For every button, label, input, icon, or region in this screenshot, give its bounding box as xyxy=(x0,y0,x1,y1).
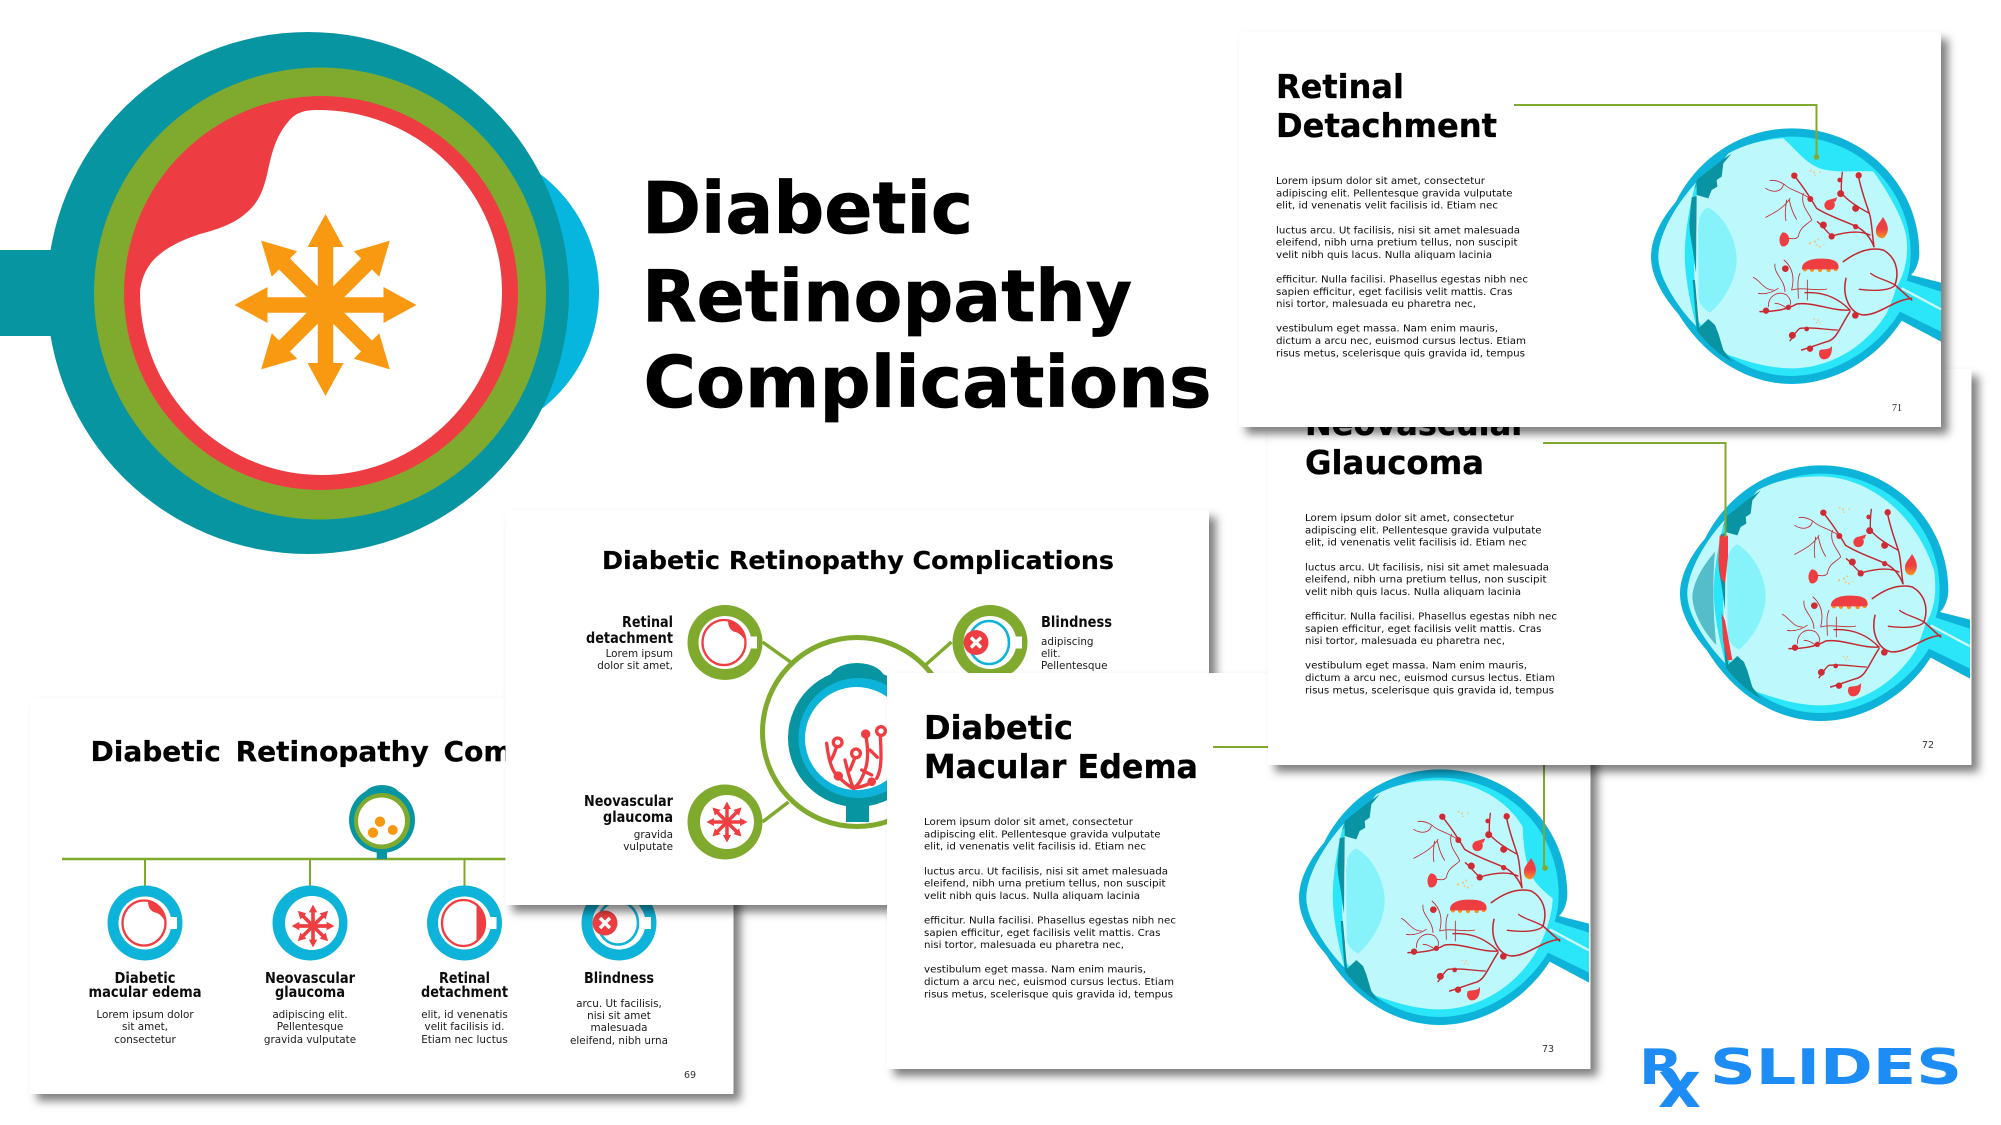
body text: nisi tortor, malesuada eu pharetra nec, xyxy=(1305,636,1505,647)
body text: Lorem ipsum dolor sit amet, consectetur xyxy=(924,817,1134,828)
panel: slide 70 hub diagram xyxy=(506,510,1209,905)
top eye icon xyxy=(349,785,415,859)
red neovascular tissue xyxy=(1718,536,1728,583)
body text: luctus arcu. Ut facilisis, nisi sit amet malesuada xyxy=(924,866,1168,877)
leader line xyxy=(1543,443,1726,537)
panel: slide 69 timeline xyxy=(30,698,734,1094)
slide heading xyxy=(1305,405,1527,482)
connector stems xyxy=(145,859,464,886)
item: retinal detachment: Retinal xyxy=(439,970,490,987)
central hub ring xyxy=(762,638,952,826)
item: neovascular glaucoma: gravida xyxy=(634,829,673,841)
slide heading: Neovascular xyxy=(1305,405,1527,443)
body text: dictum a arcu nec, euismod cursus lectus. Etiam xyxy=(1305,673,1555,684)
item: neovascular glaucoma: gravida vulputate xyxy=(264,1034,356,1046)
item: blindness: elit. xyxy=(1041,648,1061,660)
body text: risus metus, scelerisque quis gravida id, tempus xyxy=(924,989,1173,1000)
item: neovascular glaucoma: Neovascular xyxy=(584,793,674,810)
body text: velit nibh quis lacus. Nulla aliquam lacinia xyxy=(1305,587,1521,598)
item: retinal detachment: Etiam nec luctus xyxy=(421,1034,508,1046)
item: diabetic macular edema: Lorem ipsum dolor xyxy=(96,1009,194,1021)
body text: elit, id venenatis velit facilisis id. Etiam nec xyxy=(1305,538,1527,549)
item: neovascular glaucoma: glaucoma xyxy=(603,809,673,826)
logo: Rx Slides xyxy=(1639,1039,1962,1123)
body text: sapien efficitur, eget facilisis velit mattis. Cras xyxy=(1305,624,1542,635)
body text: Lorem ipsum dolor sit amet, consectetur xyxy=(1305,513,1515,524)
body text: luctus arcu. Ut facilisis, nisi sit amet malesuada xyxy=(1305,562,1549,573)
timeline line xyxy=(62,858,650,860)
connectors xyxy=(762,642,952,822)
item: retinal detachment: Retinal xyxy=(622,614,673,631)
item: diabetic macular edema: Diabetic xyxy=(114,970,176,987)
body text: risus metus, scelerisque quis gravida id, tempus xyxy=(1305,685,1554,696)
item: blindness xyxy=(570,886,668,1047)
body text: velit nibh quis lacus. Nulla aliquam lacinia xyxy=(924,891,1140,902)
item: blindness: nisi sit amet xyxy=(587,1010,651,1022)
body text: dictum a arcu nec, euismod cursus lectus. Etiam xyxy=(1276,336,1526,347)
icon: coral vessels xyxy=(827,725,887,788)
body text: eleifend, nibh urna pretium tellus, non suscipit xyxy=(1276,238,1518,249)
darkened anterior chamber xyxy=(1692,552,1716,645)
body text: nisi tortor, malesuada eu pharetra nec, xyxy=(1276,299,1476,310)
body text: vestibulum eget massa. Nam enim mauris, xyxy=(924,965,1146,976)
item: neovascular glaucoma: Pellentesque xyxy=(277,1021,343,1033)
item: blindness: eleifend, nibh urna xyxy=(570,1035,668,1047)
body text xyxy=(1305,513,1557,696)
item: retinal detachment: detachment xyxy=(421,984,508,1001)
slide heading: Diabetic Retinopathy Complications xyxy=(602,546,1114,575)
green choroid ring xyxy=(94,68,546,520)
item: neovascular glaucoma xyxy=(584,784,762,860)
body text: luctus arcu. Ut facilisis, nisi sit amet malesuada xyxy=(1276,225,1520,236)
item: diabetic macular edema: macular edema xyxy=(88,984,202,1001)
slide heading xyxy=(924,709,1198,786)
panel: slide 73 diabetic macular edema xyxy=(887,673,1590,1069)
slide heading: Diabetic xyxy=(924,709,1073,747)
item: retinal detachment: dolor sit amet, xyxy=(597,660,673,672)
body text xyxy=(924,817,1176,1000)
item: blindness: adipiscing xyxy=(1041,636,1094,648)
item: retinal detachment: velit facilisis id. xyxy=(425,1021,504,1033)
body text: sapien efficitur, eget facilisis velit mattis. Cras xyxy=(924,928,1160,939)
item: neovascular glaucoma xyxy=(264,886,356,1046)
item: neovascular glaucoma: vulputate xyxy=(623,841,673,853)
slide heading xyxy=(1276,68,1497,145)
main title xyxy=(642,167,1212,424)
big eye icon xyxy=(0,32,599,554)
item: neovascular glaucoma: adipiscing elit. xyxy=(272,1009,348,1021)
eye sclera xyxy=(47,32,569,554)
slide heading: Glaucoma xyxy=(1305,444,1484,482)
slide heading: Detachment xyxy=(1276,107,1497,145)
item: blindness xyxy=(952,605,1112,680)
item: diabetic macular edema: consectetur xyxy=(114,1034,177,1046)
item: blindness: arcu. Ut facilisis, xyxy=(576,998,662,1010)
eye illustration: retinal detachment xyxy=(1651,128,1941,384)
page number: 72 xyxy=(1922,740,1934,751)
body text: vestibulum eget massa. Nam enim mauris, xyxy=(1276,324,1498,335)
slide heading: Retinal xyxy=(1276,68,1404,106)
body text: eleifend, nibh urna pretium tellus, non suscipit xyxy=(1305,575,1547,586)
item: retinal detachment: Lorem ipsum xyxy=(606,648,673,660)
body text: adipiscing elit. Pellentesque gravida vulputate xyxy=(1276,188,1512,199)
slide heading: Macular Edema xyxy=(924,748,1198,786)
body text: nisi tortor, malesuada eu pharetra nec, xyxy=(924,940,1124,951)
logo: Rx Slides: R xyxy=(1639,1039,1683,1096)
panel: slide 71 retinal detachment xyxy=(1239,32,1941,427)
white vitreous with detachment xyxy=(140,110,502,475)
main title: Complications xyxy=(644,341,1212,424)
body text: vestibulum eget massa. Nam enim mauris, xyxy=(1305,661,1527,672)
leader line xyxy=(1213,747,1544,866)
leader dot xyxy=(1814,154,1819,160)
body text: Lorem ipsum dolor sit amet, consectetur xyxy=(1276,176,1486,187)
page number: 69 xyxy=(684,1070,696,1081)
item: retinal detachment: elit, id venenatis xyxy=(421,1009,508,1021)
body text: adipiscing elit. Pellentesque gravida vulputate xyxy=(924,829,1160,840)
item: blindness: Blindness xyxy=(584,970,654,987)
item: neovascular glaucoma: glaucoma xyxy=(275,984,345,1001)
body text: velit nibh quis lacus. Nulla aliquam lacinia xyxy=(1276,250,1492,261)
item: blindness: Blindness xyxy=(1041,614,1112,631)
page number: 71 xyxy=(1892,403,1902,414)
item: retinal detachment: detachment xyxy=(586,630,673,647)
body text: elit, id venenatis velit facilisis id. Etiam nec xyxy=(924,842,1146,853)
body text: efficitur. Nulla facilisi. Phasellus egestas nibh nec xyxy=(1305,612,1557,622)
item: blindness: Pellentesque xyxy=(1041,660,1108,672)
item: diabetic macular edema: sit amet, xyxy=(122,1021,168,1033)
red retina ring xyxy=(124,96,518,490)
body text: eleifend, nibh urna pretium tellus, non suscipit xyxy=(924,879,1166,890)
main title: Retinopathy xyxy=(642,255,1132,338)
body text: risus metus, scelerisque quis gravida id, tempus xyxy=(1276,348,1525,359)
item: blindness: malesuada xyxy=(590,1022,648,1034)
body text: adipiscing elit. Pellentesque gravida vulputate xyxy=(1305,525,1542,536)
body text: sapien efficitur, eget facilisis velit mattis. Cras xyxy=(1276,287,1512,298)
eye illustration: macular edema xyxy=(1299,769,1589,1025)
optic nerve stem xyxy=(0,250,60,336)
panel: slide 72 neovascular glaucoma xyxy=(1268,369,1972,765)
item: diabetic macular edema xyxy=(88,886,202,1046)
eye illustration: neovascular glaucoma xyxy=(1680,465,1970,721)
main title: Diabetic xyxy=(642,167,973,250)
body text xyxy=(1276,176,1528,359)
page number: 73 xyxy=(1542,1044,1554,1055)
slide heading: Diabetic Retinopathy Complications xyxy=(90,735,666,768)
body text: elit, id venenatis velit facilisis id. Etiam nec xyxy=(1276,201,1498,212)
eye cornea xyxy=(303,144,599,440)
body text: efficitur. Nulla facilisi. Phasellus egestas nibh nec xyxy=(924,916,1176,926)
body text: efficitur. Nulla facilisi. Phasellus egestas nibh nec xyxy=(1276,274,1528,286)
item: retinal detachment xyxy=(421,886,508,1046)
item: neovascular glaucoma: Neovascular xyxy=(265,970,356,987)
leader line xyxy=(1514,105,1816,156)
logo: Rx Slides: SLIDES xyxy=(1710,1039,1962,1096)
leader dot xyxy=(1542,865,1548,871)
body text: dictum a arcu nec, euismod cursus lectus. Etiam xyxy=(924,977,1174,988)
red neovascular tissue lower xyxy=(1722,613,1732,660)
central eye icon xyxy=(788,663,926,822)
item: retinal detachment xyxy=(586,605,762,680)
logo: Rx Slides: x xyxy=(1658,1049,1701,1123)
icon: eight-way arrows xyxy=(234,214,416,396)
